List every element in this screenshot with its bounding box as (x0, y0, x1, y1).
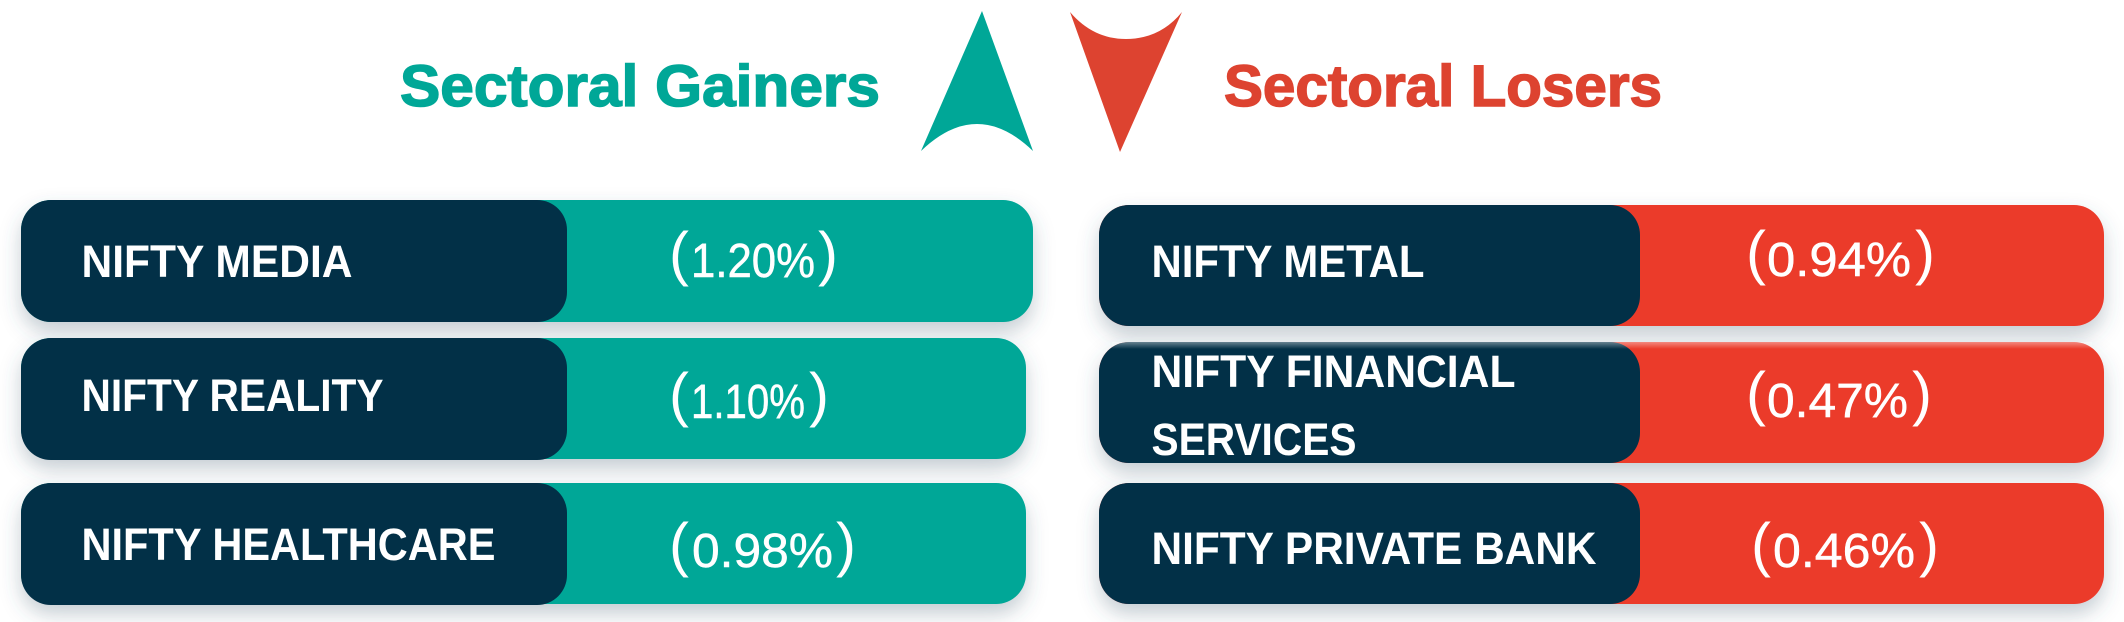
panel: gainer Nifty Reality: ) (809, 361, 829, 428)
panel: loser Nifty Private Bank: 0.46% (1773, 525, 1915, 578)
panel: loser Nifty Private Bank: ) (1919, 511, 1939, 578)
panel: loser Nifty Private Bank: NIFTY PRIVATE BANK (1152, 523, 1597, 574)
panel: loser Nifty Financial Services: 0.47% (1767, 375, 1908, 428)
panel: loser Nifty Financial Services: ) (1912, 360, 1932, 427)
panel: gainer Nifty Media (21, 200, 1033, 322)
panel: loser Nifty Metal (1099, 205, 2104, 326)
panel: gainer Nifty Healthcare: NIFTY HEALTHCARE (82, 519, 496, 570)
panel: gainer Nifty Media: NIFTY MEDIA (82, 236, 352, 287)
heading: Sectoral Losers: Sectoral Losers (1224, 54, 1662, 119)
panel: gainer Nifty Healthcare (21, 483, 1026, 605)
panel: gainer Nifty Media: 1.20% (691, 235, 815, 288)
panel: gainer Nifty Healthcare: ( (669, 511, 689, 578)
panel: loser Nifty Private Bank: ( (1751, 511, 1771, 578)
panel: loser Nifty Metal: ( (1746, 219, 1766, 286)
panel: loser Nifty Financial Services: ( (1746, 360, 1766, 427)
panel: gainer Nifty Reality: NIFTY REALITY (82, 370, 384, 421)
panel: loser Nifty Metal: NIFTY METAL (1152, 236, 1424, 287)
panel: loser Nifty Financial Services: NIFTY FINANCIAL (1152, 346, 1516, 397)
panel: gainer Nifty Reality (21, 338, 1026, 460)
panel: loser Nifty Financial Services (1099, 342, 2104, 465)
icon: up arrow (921, 11, 1033, 151)
panel: loser Nifty Financial Services: SERVICES (1152, 414, 1356, 465)
heading: Sectoral Gainers: Sectoral Gainers (400, 54, 880, 119)
panel: loser Nifty Private Bank (1099, 483, 2104, 604)
panel: gainer Nifty Healthcare: 0.98% (692, 525, 833, 578)
panel: gainer Nifty Healthcare: ) (836, 511, 856, 578)
panel: loser Nifty Metal: 0.94% (1767, 234, 1911, 287)
panel: gainer Nifty Reality: 1.10% (691, 376, 805, 429)
panel: gainer Nifty Media: ) (818, 220, 838, 287)
panel: gainer Nifty Media: ( (669, 220, 689, 287)
panel: loser Nifty Metal: ) (1915, 219, 1935, 286)
panel: gainer Nifty Reality: ( (669, 361, 689, 428)
icon: down arrow (1070, 12, 1182, 152)
